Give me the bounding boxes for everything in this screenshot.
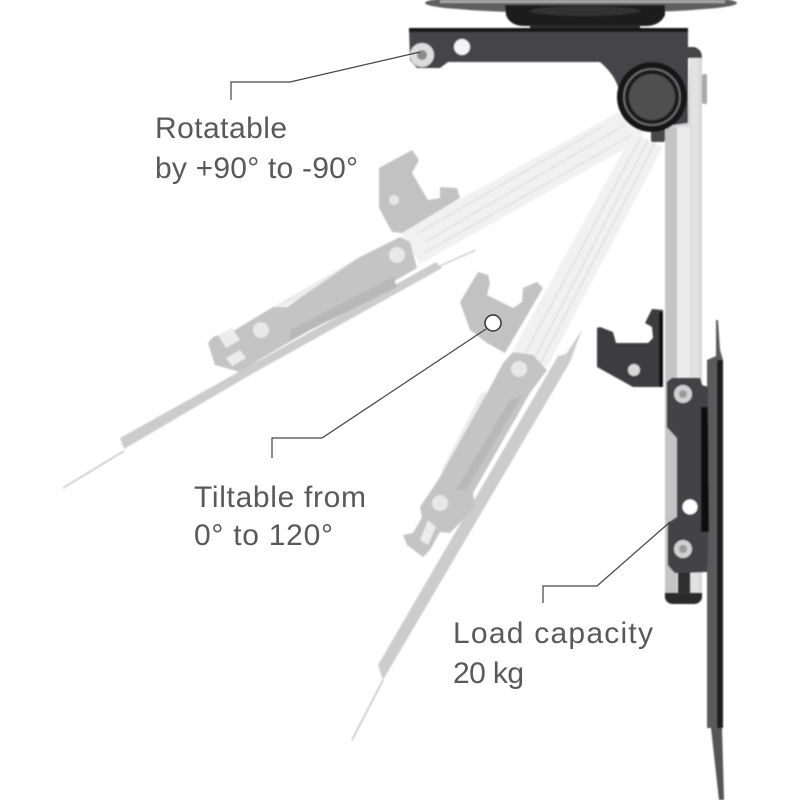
sliding bracket [667,378,708,573]
carrier [208,237,417,372]
bracket hole [454,39,470,55]
screws [674,385,692,403]
label: load capacity: Load capacity [453,617,653,650]
label: tiltable: Tiltable from [194,481,366,514]
vertical arm hardware [597,309,724,800]
rail [665,58,702,603]
bracket screw [410,43,434,67]
label: load capacity: 20 kg [453,657,524,690]
leader marker: tilt [485,315,501,331]
label: rotatable [155,112,358,185]
pivot knob [617,62,687,132]
rail [513,133,663,367]
label: rotatable: by +90° to -90° [155,152,358,185]
rail foot [665,593,702,604]
leader line: tilt [272,329,486,458]
rail end cap [688,47,702,58]
label: tiltable: 0° to 120° [194,519,333,552]
ghost arm raised position [63,113,648,488]
rail [400,113,648,264]
carrier [403,352,547,557]
slot hole [682,500,698,514]
leader line: rotatable [231,52,420,100]
display panel [120,262,442,449]
hook [460,272,543,353]
leader line: load [543,522,670,603]
label: rotatable: Rotatable [155,112,287,145]
display panel [707,320,723,728]
pivot tab [651,128,665,142]
ghost arm intermediate position [352,133,663,740]
hook [597,309,663,387]
label: load capacity [453,617,653,690]
ceiling mount [409,0,737,603]
display panel [378,330,582,680]
light rail strip [440,392,490,477]
rail side lumps [702,74,707,104]
ceiling plate [425,0,737,13]
light rail strip [273,258,358,307]
L bracket [409,28,688,130]
label: tiltable [194,481,366,552]
pivot pad [505,5,665,26]
hook [379,150,460,233]
